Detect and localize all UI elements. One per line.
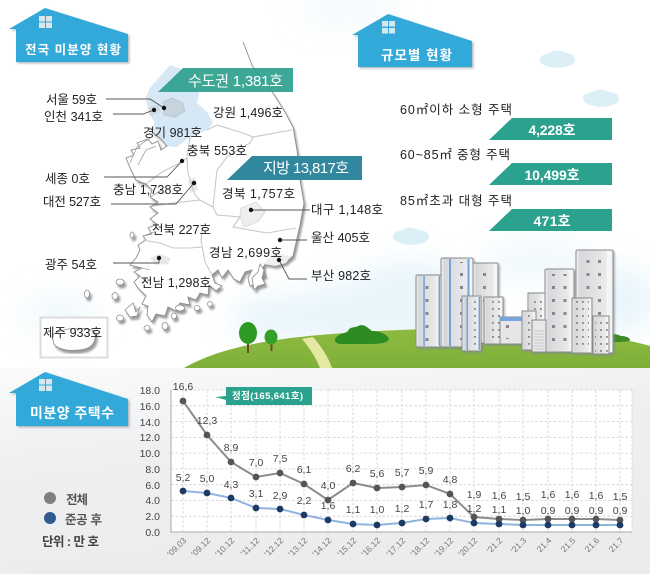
legend: 단위 : 만 호 xyxy=(42,535,99,549)
panel: unsold housing chart xyxy=(0,368,650,574)
data labels: total: 1,6 xyxy=(492,490,506,502)
trees and bushes xyxy=(239,322,630,353)
x axis labels: '21.3 xyxy=(508,535,529,555)
illustration: apartment buildings xyxy=(416,250,613,354)
map labels: 경북 1,757호 xyxy=(222,187,295,201)
data labels: total: 1,9 xyxy=(467,489,481,501)
map labels: 충북 553호 xyxy=(187,144,247,158)
land xyxy=(126,65,304,322)
small housing: 4,228호 xyxy=(528,122,576,138)
region: Daejeon xyxy=(188,177,198,193)
y axis labels: 8.0 xyxy=(145,464,160,476)
data labels: total: 5,6 xyxy=(370,468,384,480)
x axis labels: '18.12 xyxy=(408,535,432,559)
y axis labels: 10.0 xyxy=(140,448,160,460)
data labels: after completion: 1,2 xyxy=(395,503,409,515)
map labels: 울산 405호 xyxy=(311,231,370,245)
west coast inlets xyxy=(130,138,162,284)
y axis labels: 2.0 xyxy=(145,511,160,523)
large housing xyxy=(400,194,612,231)
banner: provinces: 지방 13,817호 xyxy=(263,160,349,177)
map labels: 대전 527호 xyxy=(43,195,101,209)
legend xyxy=(42,492,102,549)
map labels: 전북 227호 xyxy=(152,223,211,237)
x axis labels: '13.12 xyxy=(286,535,310,559)
data labels: after completion: 2,2 xyxy=(297,495,311,507)
data labels: total: 1,6 xyxy=(541,489,555,501)
x axis labels: '12.12 xyxy=(262,535,286,559)
data labels: total: 7,0 xyxy=(249,457,263,469)
y axis labels: 14.0 xyxy=(140,417,160,429)
data labels: after completion: 1,0 xyxy=(370,504,384,516)
y axis labels: 18.0 xyxy=(140,385,160,397)
badge: unsold houses xyxy=(9,372,128,426)
data labels: after completion: 1,7 xyxy=(419,499,433,511)
banner: capital area: 수도권 1,381호 xyxy=(188,73,283,90)
x axis labels: 21.6 xyxy=(583,535,602,554)
x axis labels: '09.03 xyxy=(165,535,189,559)
series: total xyxy=(180,398,623,523)
map: Korean peninsula xyxy=(84,42,304,330)
badge: national status: 전국 미분양 현황 xyxy=(25,42,121,57)
x axis labels: '14.12 xyxy=(310,535,334,559)
region: Seoul xyxy=(163,98,185,117)
data labels: after completion: 3,1 xyxy=(249,488,263,500)
map labels: 전남 1,298호 xyxy=(141,276,211,290)
callout: peak: 정점(165,641호) xyxy=(232,390,303,402)
data labels: total: 4,8 xyxy=(443,474,457,486)
y axis labels: 16.0 xyxy=(140,401,160,413)
x axis labels: 21.7 xyxy=(607,535,626,554)
large housing: 85㎡초과 대형 주택 xyxy=(400,194,512,208)
data labels: after completion: 0,9 xyxy=(541,505,555,517)
map labels: 대구 1,148호 xyxy=(311,203,383,217)
data labels: after completion xyxy=(176,472,627,517)
clouds xyxy=(393,50,619,245)
Jeju inset: 제주 933호 xyxy=(43,326,102,340)
y axis labels: 4.0 xyxy=(145,495,160,507)
islands xyxy=(84,232,265,330)
data labels: total: 1,6 xyxy=(589,490,603,502)
x axis labels: 21.5 xyxy=(559,535,578,554)
data labels: total: 4,0 xyxy=(321,480,335,492)
x axis labels: '10.12 xyxy=(213,535,237,559)
x axis labels: '20.12 xyxy=(456,535,480,559)
region: Gyeonggi xyxy=(146,65,213,147)
data labels: total: 1,5 xyxy=(516,491,530,503)
callout: peak xyxy=(215,387,312,405)
data labels: total: 8,9 xyxy=(224,442,238,454)
x axis labels: '15.12 xyxy=(335,535,359,559)
x axis labels: '17.12 xyxy=(384,535,408,559)
y axis labels: 12.0 xyxy=(140,432,160,444)
badge: national status xyxy=(9,8,128,62)
banner: provinces xyxy=(227,156,362,180)
Jeju inset xyxy=(40,318,108,358)
banner: capital area xyxy=(158,68,293,92)
data labels: after completion: 0,9 xyxy=(565,505,579,517)
medium housing: 60~85㎡ 중형 주택 xyxy=(400,148,510,162)
y axis labels: 6.0 xyxy=(145,480,160,492)
medium housing: 10,499호 xyxy=(524,167,580,183)
large housing: 471호 xyxy=(534,213,571,229)
map labels xyxy=(43,93,383,290)
x axis labels: '19.12 xyxy=(432,535,456,559)
x axis labels: '16.12 xyxy=(359,535,383,559)
x axis labels: 21.4 xyxy=(535,535,554,554)
data labels: total: 12,3 xyxy=(197,415,217,427)
map labels: 경기 981호 xyxy=(143,126,202,140)
region: Daegu xyxy=(240,202,265,227)
region: Busan xyxy=(263,253,291,266)
y axis labels xyxy=(140,385,160,539)
medium housing xyxy=(400,148,612,185)
region: Incheon xyxy=(148,104,161,116)
data labels: total: 6,2 xyxy=(346,463,360,475)
data labels: after completion: 1,0 xyxy=(516,505,530,517)
map labels: 광주 54호 xyxy=(45,258,97,272)
data labels: after completion: 1,1 xyxy=(492,504,506,516)
badge: by size: 규모별 현황 xyxy=(381,48,453,63)
small housing xyxy=(400,103,612,140)
x axis labels: '21.2 xyxy=(484,535,505,555)
map labels: 경남 2,699호 xyxy=(209,246,282,260)
legend: 준공 후 xyxy=(65,512,102,527)
data labels: total: 5,7 xyxy=(395,467,409,479)
line chart xyxy=(140,381,632,559)
data labels: total: 7,5 xyxy=(273,453,287,465)
data labels: after completion: 1,6 xyxy=(321,500,335,512)
coast line xyxy=(126,42,304,322)
data labels: after completion: 4,3 xyxy=(224,479,238,491)
data labels: after completion: 1,8 xyxy=(443,499,457,511)
data labels: total: 1,6 xyxy=(565,489,579,501)
map labels: 강원 1,496호 xyxy=(213,106,283,120)
data labels: after completion: 1,2 xyxy=(467,503,481,515)
data labels: total: 1,5 xyxy=(613,491,627,503)
map labels: 인천 341호 xyxy=(44,109,103,124)
data labels: total: 16,6 xyxy=(173,381,193,393)
y axis labels: 0.0 xyxy=(145,527,160,539)
x axis labels: '11.12 xyxy=(239,535,262,558)
map labels: 세종 0호 xyxy=(45,172,90,186)
data labels: after completion: 0,9 xyxy=(589,505,603,517)
data labels: total: 6,1 xyxy=(297,464,311,476)
data labels: after completion: 2,9 xyxy=(273,490,287,502)
map labels: 부산 982호 xyxy=(311,269,371,283)
data labels: after completion: 5,2 xyxy=(176,472,190,484)
map labels: 서울 59호 xyxy=(46,93,97,107)
data labels: after completion: 1,1 xyxy=(346,504,360,516)
data labels: after completion: 0,9 xyxy=(613,505,627,517)
small housing: 60㎡이하 소형 주택 xyxy=(400,103,512,117)
data labels: after completion: 5,0 xyxy=(200,473,214,485)
badge: unsold houses: 미분양 주택수 xyxy=(30,405,114,421)
size list xyxy=(400,103,612,231)
legend: 전체 xyxy=(66,493,88,507)
region borders xyxy=(143,125,296,275)
badge: by size xyxy=(352,14,472,67)
hill xyxy=(184,328,650,368)
data labels: total: 5,9 xyxy=(419,465,433,477)
leader lines and dots xyxy=(104,99,310,279)
series: after completion xyxy=(180,488,623,528)
data labels: total xyxy=(173,381,627,503)
x axis labels xyxy=(165,535,626,559)
map labels: 충남 1,738호 xyxy=(113,183,183,197)
x axis labels: '09.12 xyxy=(189,535,213,559)
region: Gwangju xyxy=(150,254,171,265)
